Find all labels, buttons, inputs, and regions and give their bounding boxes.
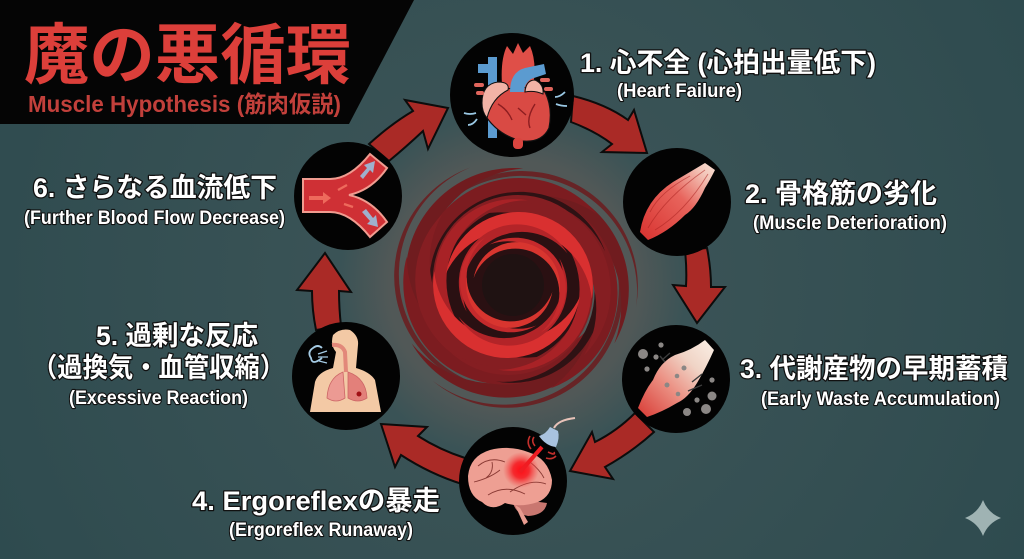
title banner: [0, 0, 414, 124]
label 5: (Excessive Reaction): [69, 388, 248, 409]
node 1: heart icon: [450, 33, 574, 157]
node 3: muscle with waste icon: [622, 325, 730, 433]
label 6: [24, 173, 285, 229]
label 6: 6. さらなる血流低下: [33, 173, 277, 203]
label 2: (Muscle Deterioration): [753, 213, 947, 234]
node 5: lungs icon: [292, 322, 400, 430]
label 5: [32, 321, 285, 409]
subtitle: Muscle Hypothesis (筋肉仮説): [28, 91, 341, 117]
label 2: [745, 179, 947, 234]
node 4: brain icon: [459, 418, 575, 535]
icon: sparkle: [965, 500, 1001, 536]
arrow: 1 to 2: [571, 96, 647, 153]
arrow: 2 to 3: [673, 248, 725, 323]
label 1: (Heart Failure): [617, 81, 742, 102]
arrow: 6 to 1: [369, 100, 448, 161]
node 2: muscle icon: [623, 148, 731, 256]
title: 魔の悪循環: [24, 18, 351, 92]
label 2: 2. 骨格筋の劣化: [745, 179, 937, 209]
label 3: (Early Waste Accumulation): [761, 389, 1000, 410]
label 6: (Further Blood Flow Decrease): [24, 208, 285, 229]
label 4: 4. Ergoreflexの暴走: [192, 486, 440, 516]
label 1: [580, 48, 876, 102]
label 5: （過換気・血管収縮）: [32, 353, 285, 383]
central vortex: [362, 136, 670, 455]
node 6: blood vessel icon: [294, 142, 402, 250]
label 3: [740, 354, 1008, 410]
arrow: 4 to 5: [381, 424, 465, 484]
vortex core: [482, 254, 544, 316]
arrow: 3 to 4: [570, 413, 654, 479]
label 3: 3. 代謝産物の早期蓄積: [740, 354, 1008, 384]
label 1: 1. 心不全 (心拍出量低下): [580, 48, 876, 78]
label 4: (Ergoreflex Runaway): [229, 520, 413, 541]
label 5: 5. 過剰な反応: [96, 321, 258, 351]
label 4: [192, 486, 440, 541]
arrow: 5 to 6: [297, 253, 351, 330]
